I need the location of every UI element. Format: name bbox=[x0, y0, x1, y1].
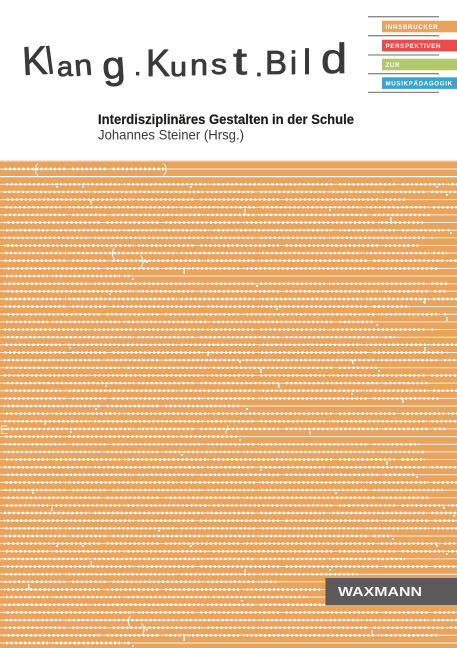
series title: handwritten logo: g bbox=[101, 44, 127, 88]
series title: handwritten logo: u bbox=[170, 52, 187, 82]
series title: handwritten logo: B bbox=[265, 44, 287, 81]
text: editor: Johannes Steiner (Hrsg.) bbox=[98, 126, 244, 142]
stray punctuation in the text lines: ( bbox=[127, 613, 132, 628]
tag: Zur: ZUR bbox=[386, 62, 400, 69]
tag: Musikpädagogik: MUSIKPÄDAGOGIK bbox=[386, 81, 453, 88]
tag: Innsbrucker: INNSBRUCKER bbox=[386, 24, 438, 31]
series title: handwritten logo: . bbox=[255, 51, 263, 82]
stray punctuation in the text lines: ) bbox=[141, 621, 145, 636]
stray punctuation in the text lines: ) bbox=[163, 161, 167, 176]
series title: handwritten logo: s bbox=[211, 49, 227, 81]
series label: stacked coloured tags bbox=[368, 17, 457, 92]
series title: handwritten logo: d bbox=[321, 35, 347, 82]
thin rules running through and past the dotted lines bbox=[0, 169, 457, 643]
series title: handwritten logo: n bbox=[73, 50, 94, 83]
series title: handwritten logo: i bbox=[290, 45, 297, 81]
stray punctuation in the text lines: ( bbox=[34, 161, 39, 176]
series title: handwritten logo: t bbox=[233, 41, 248, 83]
series title: handwritten logo: l bbox=[43, 40, 56, 83]
series title: handwritten logo: l bbox=[303, 43, 311, 82]
stray punctuation in the text lines: E bbox=[0, 423, 8, 437]
stray punctuation in the text lines: ( bbox=[111, 245, 116, 260]
tag: Perspektiven: PERSPEKTIVEN bbox=[386, 43, 441, 50]
series title: handwritten logo bbox=[21, 35, 347, 88]
series title: handwritten logo: a bbox=[57, 51, 73, 82]
stray punctuation in the text lines: / bbox=[225, 423, 229, 437]
series title: handwritten logo: n bbox=[190, 49, 208, 82]
publisher name: WAXMANN bbox=[338, 584, 422, 599]
series title: handwritten logo: K bbox=[21, 39, 49, 84]
publisher box bbox=[326, 578, 457, 606]
heading: book title: Interdisziplinäres Gestalten in der Schule bbox=[98, 111, 354, 127]
series title: handwritten logo: K bbox=[146, 43, 170, 85]
stray punctuation in the text lines bbox=[0, 161, 229, 636]
panel: orange field with abstracted text lines bbox=[0, 160, 457, 648]
series title: handwritten logo: . bbox=[134, 51, 141, 81]
stray punctuation in the text lines: ) bbox=[140, 253, 144, 268]
